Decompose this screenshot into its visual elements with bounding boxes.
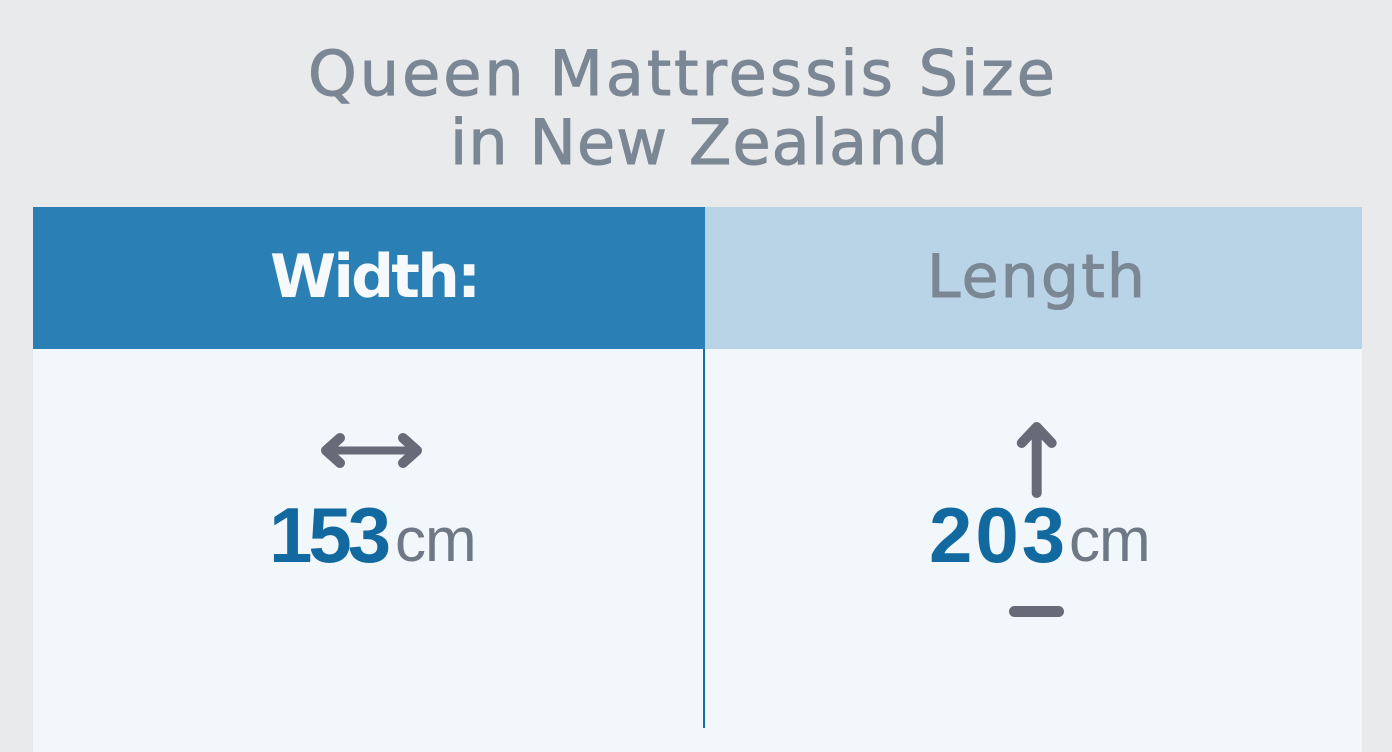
panel: width column bbox=[33, 207, 705, 752]
title bbox=[308, 37, 1058, 179]
icon: horizontal arrow bbox=[321, 433, 422, 468]
icon: dash bbox=[1009, 606, 1064, 617]
width value bbox=[269, 491, 476, 579]
panel: length column bbox=[705, 207, 1362, 752]
length value: 203 bbox=[929, 491, 1068, 579]
column divider bbox=[703, 349, 705, 728]
width value: 153 bbox=[269, 491, 387, 579]
length heading: Length bbox=[927, 242, 1147, 312]
length header bbox=[705, 207, 1362, 349]
length value bbox=[929, 491, 1150, 579]
title: Queen Mattressis Size bbox=[308, 37, 1058, 110]
title: in New Zealand bbox=[450, 106, 949, 179]
length value: cm bbox=[1069, 506, 1150, 574]
width value: cm bbox=[395, 506, 476, 574]
icon: vertical arrow bbox=[1016, 422, 1057, 498]
width header bbox=[33, 207, 705, 349]
width heading: Width: bbox=[270, 242, 478, 312]
